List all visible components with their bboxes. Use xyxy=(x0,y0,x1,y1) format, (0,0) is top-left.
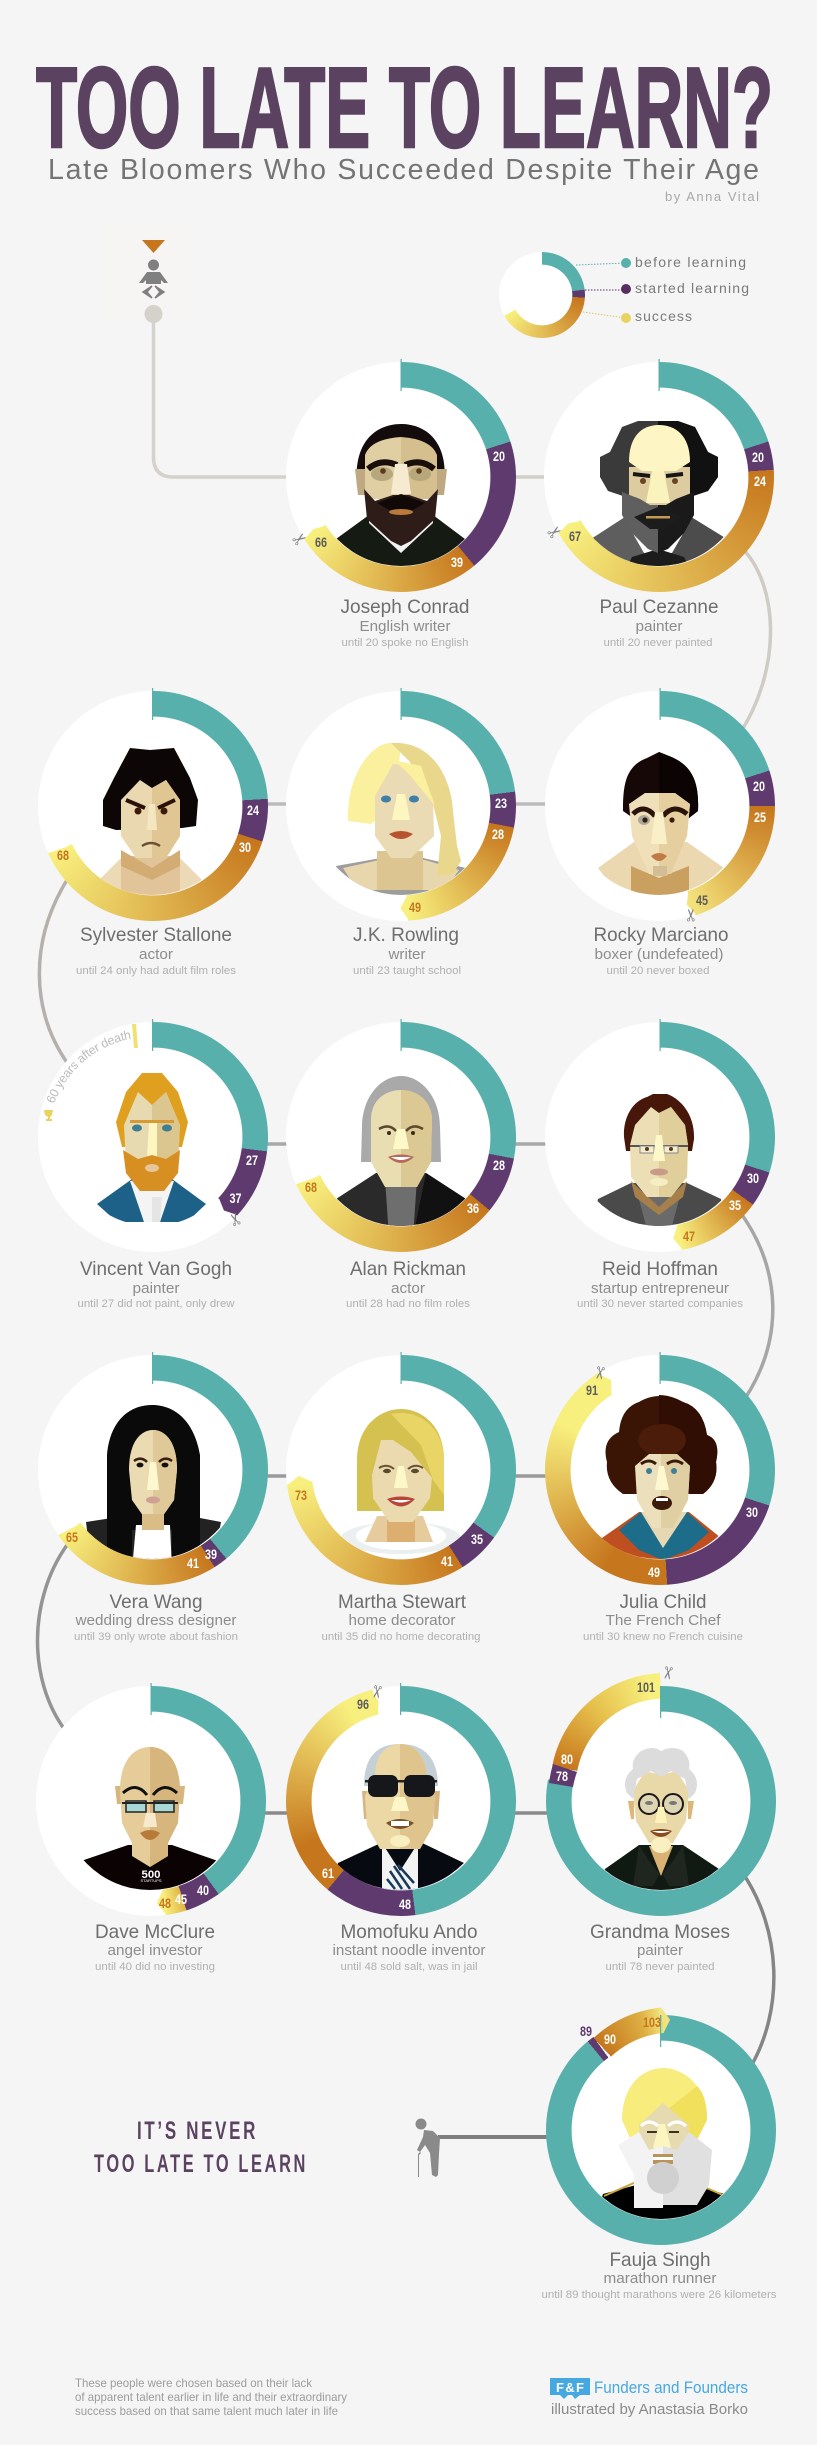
closing slogan xyxy=(94,2117,308,2178)
donut: 20, 25, 45 xyxy=(545,691,775,921)
legend dots and labels xyxy=(621,254,749,324)
icon: scissors: ✂ xyxy=(365,1683,387,1701)
portrait: Cezanne xyxy=(593,421,724,566)
caption: Rowling: J.K. Rowling xyxy=(353,924,459,946)
caption: Stewart: Martha Stewart xyxy=(338,1591,467,1613)
age labels: Wang: 39 xyxy=(205,1546,217,1562)
age labels: Conrad xyxy=(315,448,505,570)
age labels: Rickman xyxy=(305,1157,505,1216)
age labels: McClure: 40 xyxy=(197,1882,209,1898)
portrait and labels: Van Gogh xyxy=(44,1019,258,1310)
footnote: These people were chosen based on their lack xyxy=(75,2376,313,2390)
caption: Moses: painter xyxy=(637,1942,683,1959)
caption: Ando xyxy=(332,1921,486,1973)
caption: Wang: wedding dress designer xyxy=(74,1612,236,1629)
panel: Joseph Conrad xyxy=(286,359,516,649)
caption: Conrad: Joseph Conrad xyxy=(340,596,470,618)
caption: Marciano xyxy=(594,924,729,977)
portrait and labels: Cezanne xyxy=(544,359,766,649)
connector: start to Conrad xyxy=(154,320,290,477)
caption: Stallone: until 24 only had adult film roles xyxy=(76,965,237,977)
portrait and labels: Singh xyxy=(542,2008,777,2301)
caption: Cezanne: Paul Cezanne xyxy=(600,596,718,618)
connector: row 3 xyxy=(262,1142,550,1146)
icon: start marker with baby xyxy=(109,223,190,323)
age labels: Hoffman: 35 xyxy=(729,1197,741,1213)
panel: Momofuku Ando xyxy=(286,1683,516,1973)
age labels: Conrad: 20 xyxy=(493,448,505,464)
legend dots and labels: before learning xyxy=(635,254,746,270)
panel: Dave McClure xyxy=(36,1683,266,1973)
panel: Grandma Moses xyxy=(546,1664,776,1973)
connector: row 2 xyxy=(262,802,550,806)
caption: Ando: instant noodle inventor xyxy=(332,1942,486,1959)
portrait: McClure xyxy=(84,1747,216,1890)
age labels: Singh: 89 xyxy=(580,2023,592,2039)
age labels: Moses: 80 xyxy=(561,1751,573,1767)
caption: Conrad xyxy=(340,596,470,649)
caption: Singh: until 89 thought marathons were 26 kilometers xyxy=(542,2289,777,2301)
age labels: Van Gogh: 37 xyxy=(230,1190,242,1206)
portrait and labels: Stewart xyxy=(288,1352,483,1643)
caption: Stewart: until 35 did no home decorating xyxy=(322,1631,480,1643)
age labels: Van Gogh xyxy=(230,1152,258,1206)
donut: 27, 37 xyxy=(38,1022,268,1252)
icon: scissors: ✂ xyxy=(289,528,312,552)
caption: Stallone: Sylvester Stallone xyxy=(80,924,232,946)
logo: Funders and Founders: F&F xyxy=(556,2380,584,2395)
logo: Funders and Founders: Funders and Founders xyxy=(594,2379,748,2397)
caption: Rickman xyxy=(346,1258,471,1310)
donut: 39, 41, 65 xyxy=(38,1355,268,1585)
caption: McClure: until 40 did no investing xyxy=(95,1961,215,1973)
caption: Child: Julia Child xyxy=(620,1591,706,1613)
age labels: Singh xyxy=(580,2014,661,2047)
donut: 20, 39, 66 xyxy=(286,362,516,592)
age labels: Rowling: 49 xyxy=(409,899,421,915)
caption: Van Gogh: until 27 did not paint, only drew xyxy=(78,1298,235,1310)
portrait: Singh xyxy=(591,2068,731,2230)
connector: Conrad to Cezanne xyxy=(510,475,550,479)
portrait: Rickman xyxy=(336,1076,466,1226)
age labels: Rickman: 68 xyxy=(305,1179,317,1195)
portrait: Van Gogh xyxy=(97,1073,206,1222)
donut: 28, 36, 68 xyxy=(286,1022,516,1252)
caption: Singh xyxy=(542,2249,777,2301)
age labels: Marciano: 45 xyxy=(696,892,708,908)
caption: Conrad: until 20 spoke no English xyxy=(342,637,468,649)
age labels: Ando: 61 xyxy=(322,1865,334,1881)
age labels: Van Gogh: 27 xyxy=(246,1152,258,1168)
age labels: Wang xyxy=(66,1529,217,1571)
caption: Child: The French Chef xyxy=(606,1612,721,1629)
portrait: Stallone xyxy=(100,748,202,895)
caption: Child xyxy=(583,1591,743,1643)
portrait: McClure: 500 xyxy=(142,1869,160,1881)
age labels: Rickman: 36 xyxy=(467,1200,479,1216)
age labels: Singh: 90 xyxy=(604,2031,616,2047)
age labels: Cezanne: 20 xyxy=(752,449,764,465)
donut: 20, 24, 67 xyxy=(544,362,774,592)
portrait: Moses xyxy=(591,1748,731,1901)
footnote: of apparent talent earlier in life and their extraordinary xyxy=(75,2390,347,2404)
connector: Wang to McClure xyxy=(37,1545,67,1730)
caption: Wang xyxy=(74,1591,238,1643)
caption: Marciano: boxer (undefeated) xyxy=(594,946,724,963)
donut: 35, 41, 73 xyxy=(286,1355,516,1585)
caption: Moses: until 78 never painted xyxy=(606,1961,714,1973)
caption: Rickman: Alan Rickman xyxy=(350,1258,466,1280)
age labels: Cezanne xyxy=(569,449,766,544)
age labels: Stewart: 35 xyxy=(471,1531,483,1547)
legend dots and labels: started learning xyxy=(635,280,749,296)
age labels: Child xyxy=(586,1382,758,1580)
age labels: Ando: 48 xyxy=(399,1896,411,1912)
age labels: Hoffman: 30 xyxy=(747,1170,759,1186)
age labels: Moses: 78 xyxy=(556,1768,568,1784)
caption: Rickman: actor xyxy=(391,1280,425,1297)
age labels: Hoffman xyxy=(683,1170,759,1244)
portrait: Ando xyxy=(338,1744,464,1890)
caption: Ando: Momofuku Ando xyxy=(340,1921,478,1943)
caption: Hoffman: Reid Hoffman xyxy=(602,1258,718,1280)
portrait: Rowling xyxy=(336,743,466,896)
logo: Funders and Founders xyxy=(550,2378,748,2399)
donut: 48, 61, 96 xyxy=(286,1686,516,1916)
caption: Marciano: until 20 never boxed xyxy=(606,965,710,977)
portrait: McClure: STARTUPS xyxy=(141,1878,162,1883)
caption: Hoffman: until 30 never started companies xyxy=(577,1298,744,1310)
caption: Cezanne: until 20 never painted xyxy=(604,637,712,649)
age labels: Hoffman: 47 xyxy=(683,1228,695,1244)
footnote xyxy=(75,2376,347,2418)
portrait: Wang xyxy=(86,1405,221,1570)
age labels: Conrad: 66 xyxy=(315,534,327,550)
caption: Rickman: until 28 had no film roles xyxy=(346,1298,471,1310)
icon: scissors: ✂ xyxy=(224,1209,248,1229)
caption: McClure: angel investor xyxy=(108,1942,202,1959)
caption: Stallone xyxy=(76,924,237,977)
legend donut xyxy=(499,252,585,338)
age labels: Wang: 41 xyxy=(187,1555,199,1571)
caption: Child: until 30 knew no French cuisine xyxy=(583,1631,743,1643)
age labels: Stewart: 41 xyxy=(441,1553,453,1569)
panel: Reid Hoffman xyxy=(545,1019,775,1310)
footnote: success based on that same talent much later in life xyxy=(75,2404,338,2418)
caption: Moses xyxy=(590,1921,730,1973)
donut: 30, 35, 47 xyxy=(545,1022,775,1252)
legend lines xyxy=(576,263,626,318)
icon: scissors: ✂ xyxy=(544,521,567,545)
connector: row 4 xyxy=(262,1474,550,1478)
portrait: Marciano xyxy=(598,752,724,898)
age labels: Cezanne: 24 xyxy=(754,473,766,489)
age labels: Moses: 101 xyxy=(637,1679,655,1695)
panel: Alan Rickman xyxy=(286,1019,516,1310)
caption: Moses: Grandma Moses xyxy=(590,1921,730,1943)
caption: Van Gogh xyxy=(78,1258,235,1310)
caption: Stewart xyxy=(322,1591,480,1643)
age labels: Marciano xyxy=(696,778,766,908)
donut spiral: 80 to 101 xyxy=(550,1673,780,1903)
portrait and labels: Stallone xyxy=(48,688,259,977)
connector: Hoffman to Child xyxy=(740,1212,773,1400)
age labels: Conrad: 39 xyxy=(451,554,463,570)
age labels: Child: 49 xyxy=(648,1564,660,1580)
caption: Stewart: home decorator xyxy=(348,1612,456,1629)
connector: row 5 xyxy=(262,1811,552,1815)
icon: old man with cane xyxy=(416,2118,440,2177)
caption: Hoffman xyxy=(577,1258,744,1310)
portrait and labels: Rickman xyxy=(296,1019,505,1310)
caption: Conrad: English writer xyxy=(360,618,451,635)
caption: Rowling xyxy=(353,924,461,977)
donut: 24, 30, 68 xyxy=(38,691,268,921)
caption: Singh: Fauja Singh xyxy=(610,2249,710,2271)
age labels: Rowling: 28 xyxy=(492,826,504,842)
age labels: Ando xyxy=(322,1696,411,1912)
icon: scissors: ✂ xyxy=(588,1364,610,1382)
connector: Cezanne to Marciano xyxy=(742,548,771,730)
age labels: McClure: 48 xyxy=(159,1895,171,1911)
age labels: McClure: 45 xyxy=(175,1891,187,1907)
age labels: Stallone: 30 xyxy=(239,839,251,855)
age labels: Cezanne: 67 xyxy=(569,528,581,544)
caption: Wang: Vera Wang xyxy=(110,1591,202,1613)
panel: Julia Child xyxy=(545,1352,775,1643)
caption: Van Gogh: painter xyxy=(132,1280,180,1297)
age labels: Rowling: 23 xyxy=(495,795,507,811)
portrait and labels: Conrad xyxy=(289,359,505,649)
caption: Singh: marathon runner xyxy=(604,2270,716,2287)
donut: 30, 49, 91 xyxy=(545,1355,775,1585)
age labels: Stallone xyxy=(57,802,259,863)
caption: Rowling: writer xyxy=(387,946,426,963)
portrait and labels: Child xyxy=(583,1352,758,1643)
icon: scissors: ✂ xyxy=(656,1664,678,1682)
closing slogan: TOO LATE TO LEARN xyxy=(94,2150,308,2178)
caption: Van Gogh: Vincent Van Gogh xyxy=(80,1258,232,1280)
age labels: Marciano: 20 xyxy=(753,778,765,794)
age labels: Marciano: 25 xyxy=(754,809,766,825)
panel: Rocky Marciano xyxy=(545,688,775,977)
portrait: Stewart xyxy=(341,1409,461,1554)
portrait: Conrad xyxy=(336,424,465,566)
legend dots and labels: success xyxy=(635,308,692,324)
age labels: Rowling xyxy=(409,795,507,915)
panel: J.K. Rowling xyxy=(286,688,516,977)
connector: Moses to Singh xyxy=(742,1872,774,2068)
age labels: Rickman: 28 xyxy=(493,1157,505,1173)
age labels: Moses xyxy=(556,1679,655,1784)
panel: Sylvester Stallone xyxy=(38,688,268,977)
portrait and labels: McClure xyxy=(84,1683,216,1973)
panel: Fauja Singh xyxy=(542,2008,777,2301)
portrait and labels: Marciano xyxy=(594,688,766,977)
age labels: Wang: 65 xyxy=(66,1529,78,1545)
panel: Vincent Van Gogh xyxy=(38,1019,268,1310)
illustrator credit: illustrated by Anastasia Borko xyxy=(551,2401,748,2418)
caption: McClure: Dave McClure xyxy=(95,1921,215,1943)
caption: Rowling: until 23 taught school xyxy=(353,965,461,977)
subtitle: Late Bloomers Who Succeeded Despite Their Age xyxy=(48,154,759,186)
age labels: Stallone: 24 xyxy=(247,802,259,818)
caption: Ando: until 48 sold salt, was in jail xyxy=(340,1961,478,1973)
donut: 40, 45, 48 xyxy=(36,1686,266,1916)
portrait and labels: Hoffman xyxy=(577,1019,759,1310)
donut: 78, 80 xyxy=(546,1686,776,1916)
age labels: McClure xyxy=(159,1882,209,1911)
age labels: Child: 30 xyxy=(746,1504,758,1520)
caption: Cezanne xyxy=(600,596,718,649)
age labels: Stewart xyxy=(295,1487,483,1569)
connector: Stallone to Van Gogh xyxy=(39,880,68,1064)
portrait and labels: Wang xyxy=(58,1352,238,1643)
donut spiral: 90 to 103 xyxy=(557,2007,787,2237)
portrait: Hoffman xyxy=(598,1094,722,1226)
age labels: Ando: 96 xyxy=(357,1696,369,1712)
closing slogan: IT’S NEVER xyxy=(137,2117,258,2145)
age labels: Child: 91 xyxy=(586,1382,598,1398)
age labels: Stewart: 73 xyxy=(295,1487,307,1503)
portrait: Child xyxy=(602,1395,718,1559)
icon: scissors: ✂ xyxy=(682,908,702,922)
age labels: Singh: 103 xyxy=(643,2014,661,2030)
donut: 23, 28, 49 xyxy=(286,691,516,921)
byline: by Anna Vital xyxy=(665,189,759,204)
panel: Paul Cezanne xyxy=(544,359,774,649)
caption: Marciano: Rocky Marciano xyxy=(594,924,729,946)
age labels: Stallone: 68 xyxy=(57,847,69,863)
purple segment 78 to 80 xyxy=(549,1764,577,1787)
connector: Singh to finish xyxy=(438,2135,552,2139)
caption: Hoffman: startup entrepreneur xyxy=(591,1280,729,1297)
portrait and labels: Moses xyxy=(549,1664,730,1973)
donut: 89, 90 xyxy=(546,2015,776,2245)
panel: Vera Wang xyxy=(38,1352,268,1643)
portrait and labels: Ando xyxy=(322,1683,486,1973)
caption: Wang: until 39 only wrote about fashion xyxy=(74,1631,238,1643)
annotation: 60 years after death: 60 years after death xyxy=(47,1030,131,1102)
caption: McClure xyxy=(95,1921,215,1973)
panel: Martha Stewart xyxy=(286,1352,516,1643)
caption: Stallone: actor xyxy=(139,946,173,963)
caption: Cezanne: painter xyxy=(636,618,682,635)
portrait and labels: Rowling xyxy=(336,688,507,977)
